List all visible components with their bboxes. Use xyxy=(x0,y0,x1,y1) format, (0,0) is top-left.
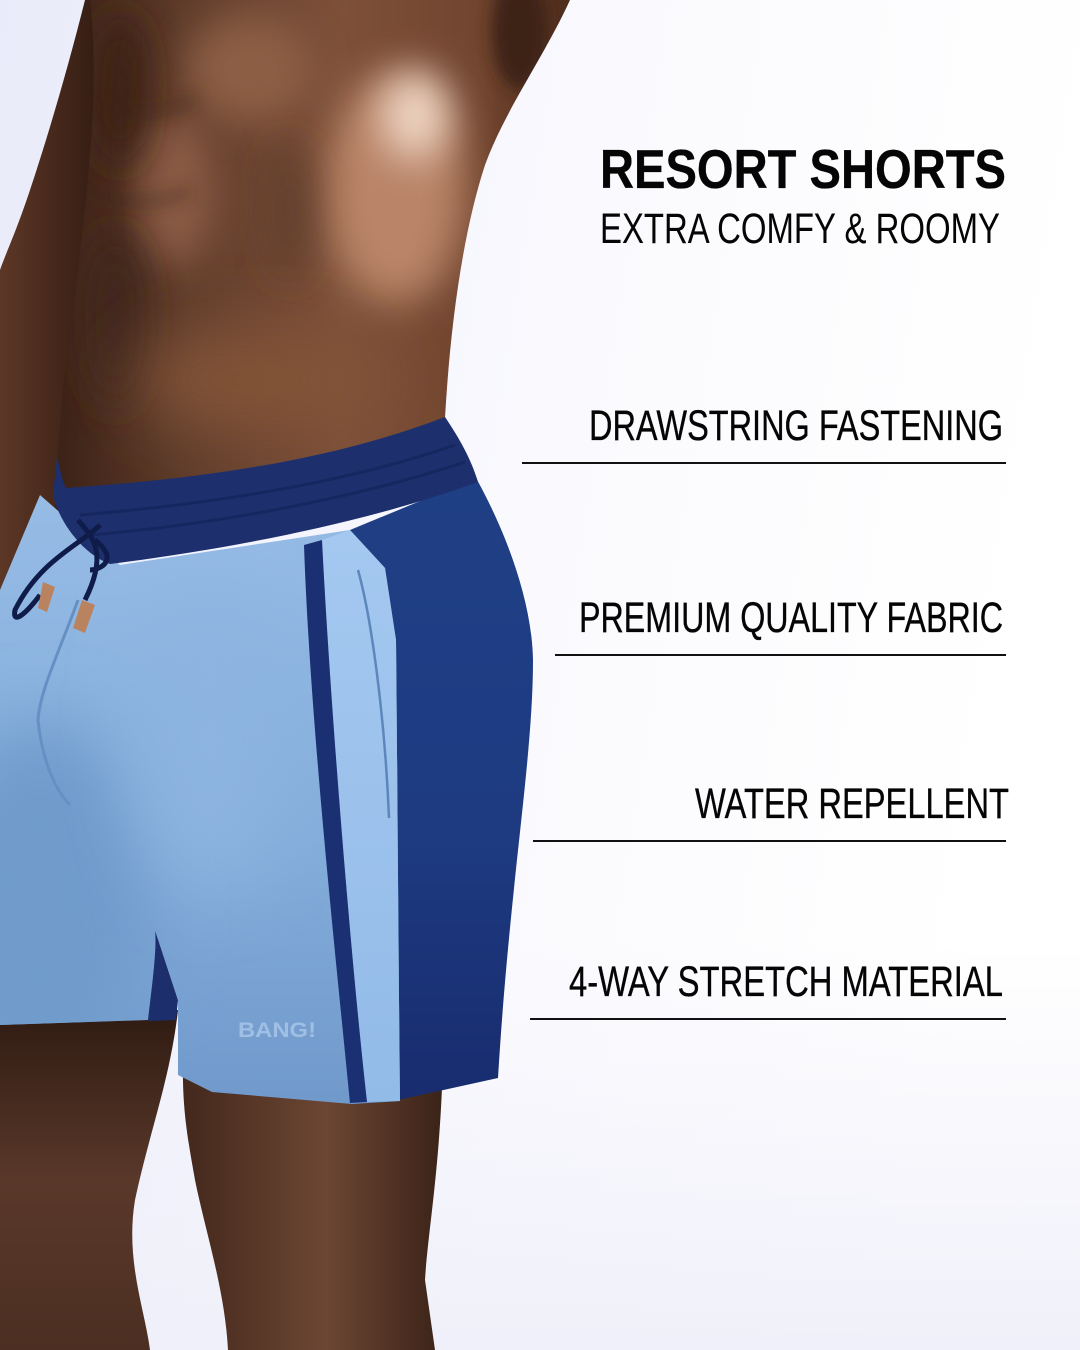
inner dark hem xyxy=(148,930,178,1021)
shorts xyxy=(0,417,533,1110)
side navy panel xyxy=(350,478,533,1100)
right leg xyxy=(183,1060,443,1350)
left arm xyxy=(0,0,120,600)
light side strip xyxy=(322,530,400,1102)
brand mark: BANG! xyxy=(238,1019,316,1042)
pocket line xyxy=(358,570,389,818)
navy side stripe xyxy=(304,540,367,1103)
waistband xyxy=(53,417,478,564)
heading: RESORT SHORTS xyxy=(600,138,1006,200)
title block xyxy=(600,138,1006,253)
centre seam xyxy=(38,600,78,805)
metal tips xyxy=(38,582,95,633)
abdominal shadows xyxy=(112,97,194,212)
light blue front panel xyxy=(0,480,420,1110)
left leg xyxy=(0,1010,178,1350)
torso xyxy=(50,0,580,520)
drawstring xyxy=(15,520,107,617)
model photo illustration xyxy=(0,0,580,1350)
